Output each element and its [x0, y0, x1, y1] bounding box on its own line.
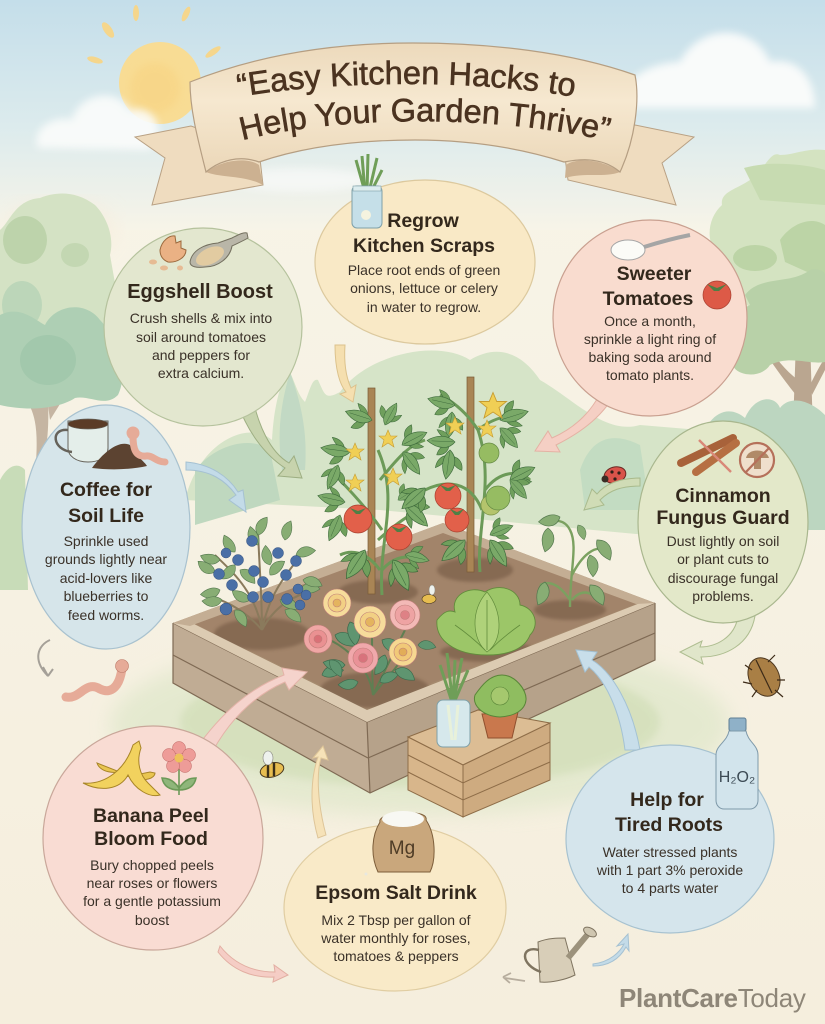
icon: banana peel — [83, 741, 160, 796]
tomato plant right — [394, 377, 540, 573]
heading: help for tired roots — [615, 789, 723, 836]
title text — [236, 60, 612, 140]
body: cinnamon: discourage fungal — [668, 570, 778, 586]
arrow: cinnamon down to bed — [680, 616, 755, 664]
banner ribbon — [190, 43, 637, 172]
arrow: eggshell to plants — [235, 395, 302, 478]
body: eggshell boost: and peppers for — [152, 347, 250, 363]
panel: help for tired roots — [566, 718, 774, 933]
icon: spoon of baking soda — [611, 235, 690, 260]
body: sweeter tomatoes: tomato plants. — [606, 367, 694, 383]
heading: cinnamon fungus guard: Cinnamon — [675, 485, 771, 507]
body: coffee: blueberries to — [64, 588, 149, 604]
beetle — [742, 653, 786, 701]
body: banana: Bury chopped peels — [90, 857, 214, 873]
heading: coffee for soil life: Coffee for — [60, 479, 152, 501]
arrow: watering left — [503, 973, 525, 983]
panel: eggshell boost — [104, 228, 302, 426]
arrow: watering up — [593, 934, 629, 966]
body: eggshell boost — [130, 310, 272, 381]
heading: banana peel bloom food — [93, 805, 209, 850]
arrow: coffee to blueberries — [186, 462, 246, 512]
tomato plant left — [314, 388, 438, 596]
panel: sweeter tomatoes — [553, 220, 747, 416]
heading: epsom salt drink: Epsom Salt Drink — [315, 882, 477, 904]
panel: banana peel bloom food — [43, 726, 263, 950]
body: coffee: feed worms. — [68, 607, 144, 623]
title text: “Easy Kitchen Hacks to — [236, 60, 575, 96]
body: cinnamon — [667, 533, 779, 604]
body: eggshell boost: extra calcium. — [158, 365, 244, 381]
heading: banana peel bloom food: Banana Peel — [93, 805, 209, 827]
body: banana: for a gentle potassium — [83, 893, 221, 909]
heading: coffee for soil life — [60, 479, 152, 527]
ladybug — [602, 464, 628, 486]
icon: flower — [162, 742, 196, 795]
body: banana: boost — [135, 912, 169, 928]
body: cinnamon: problems. — [692, 588, 754, 604]
sun — [86, 5, 222, 124]
arrow: banana to epsom — [218, 946, 288, 982]
banner left tail — [135, 126, 263, 205]
title text: Help Your Garden Thrive” — [239, 98, 612, 140]
body: sweeter tomatoes: baking soda around — [588, 349, 712, 365]
icon: no fungus — [740, 443, 774, 477]
body: eggshell boost: soil around tomatoes — [136, 329, 266, 345]
body: coffee: grounds lightly near — [45, 551, 167, 567]
body: banana — [83, 857, 221, 928]
body: cinnamon: Dust lightly on soil — [667, 533, 779, 549]
raised garden bed — [173, 523, 660, 793]
body: epsom: Mix 2 Tbsp per gallon of — [321, 912, 471, 928]
bed right side — [367, 603, 655, 793]
heading: sweeter tomatoes: Tomatoes — [603, 288, 693, 310]
watering can — [525, 925, 598, 982]
lettuce — [437, 588, 535, 655]
body: cinnamon: or plant cuts to — [677, 551, 769, 567]
panel: epsom salt drink — [284, 811, 506, 991]
body: coffee: Sprinkle used — [64, 533, 148, 549]
bee on soil — [422, 585, 436, 604]
seedling — [533, 513, 616, 608]
logo: PlantCareToday: PlantCareToday — [619, 983, 806, 1013]
icon: epsom sack — [364, 811, 434, 876]
bed left side — [173, 623, 370, 793]
body: epsom — [320, 912, 471, 964]
panel: regrow kitchen scraps — [315, 154, 535, 344]
icon: jar with scrap — [352, 154, 382, 228]
heading: eggshell boost: Eggshell Boost — [127, 281, 273, 303]
arrow: cinnamon to seedling — [584, 478, 640, 510]
banner — [134, 42, 695, 206]
heading: regrow kitchen scraps: Kitchen Scraps — [353, 235, 495, 257]
rose bush — [304, 589, 437, 695]
arrow: peroxide to bed — [576, 650, 640, 750]
icon: coffee cup and worm — [56, 419, 165, 469]
heading: sweeter tomatoes: Sweeter — [617, 263, 692, 285]
body: help — [596, 844, 743, 896]
bed soil — [173, 523, 655, 722]
body: sweeter tomatoes: Once a month, — [604, 313, 696, 329]
heading: sweeter tomatoes — [603, 263, 693, 310]
heading: coffee for soil life: Soil Life — [68, 505, 144, 527]
icon: epsom sack: Mg — [389, 838, 415, 859]
panel: cinnamon fungus guard — [638, 421, 808, 623]
heading: regrow kitchen scraps: Regrow — [387, 210, 460, 232]
panel: coffee for soil life — [22, 405, 190, 649]
icon: tomato — [703, 281, 731, 309]
body: help: to 4 parts water — [622, 880, 719, 896]
body: coffee: acid-lovers like — [60, 570, 153, 586]
arrow: baking soda to tomatoes — [535, 382, 618, 452]
blueberry bush — [195, 514, 324, 630]
heading: help for tired roots: Tired Roots — [615, 814, 723, 836]
potted lettuce — [474, 675, 526, 738]
bee near bed — [259, 751, 285, 780]
body: epsom: water monthly for roses, — [320, 930, 471, 946]
jar with onions — [437, 653, 470, 747]
body: banana: near roses or flowers — [87, 875, 217, 891]
body: regrow: Place root ends of green — [348, 262, 500, 278]
body: sweeter tomatoes: sprinkle a light ring of — [584, 331, 716, 347]
body: help: with 1 part 3% peroxide — [596, 862, 743, 878]
body: sweeter tomatoes — [584, 313, 716, 383]
body: epsom: tomatoes & peppers — [333, 948, 459, 964]
heading: regrow kitchen scraps — [353, 210, 495, 257]
heading: help for tired roots: Help for — [630, 789, 704, 811]
body: regrow: in water to regrow. — [367, 299, 481, 315]
body: eggshell boost: Crush shells & mix into — [130, 310, 272, 326]
body: regrow — [348, 262, 500, 315]
body: coffee — [45, 533, 167, 623]
arrow: scraps to tomatoes — [335, 345, 356, 402]
heading: cinnamon fungus guard: Fungus Guard — [656, 507, 790, 529]
arrow: epsom to bed — [312, 746, 328, 838]
arrow: banana to roses — [195, 668, 307, 760]
body: help: Water stressed plants — [603, 844, 737, 860]
body: regrow: onions, lettuce or celery — [350, 280, 498, 296]
wooden crate — [408, 710, 550, 817]
icon: peroxide bottle: H₂O₂ — [719, 769, 755, 786]
heading: cinnamon fungus guard — [656, 485, 790, 529]
heading: banana peel bloom food: Bloom Food — [94, 828, 208, 850]
icon: cinnamon sticks — [681, 438, 736, 472]
icon: peroxide bottle — [716, 718, 758, 809]
background trees — [0, 150, 825, 590]
earthworm — [38, 640, 128, 697]
icon: eggshell and scoop — [149, 233, 248, 270]
clouds — [37, 33, 815, 192]
banner right tail — [564, 125, 694, 205]
